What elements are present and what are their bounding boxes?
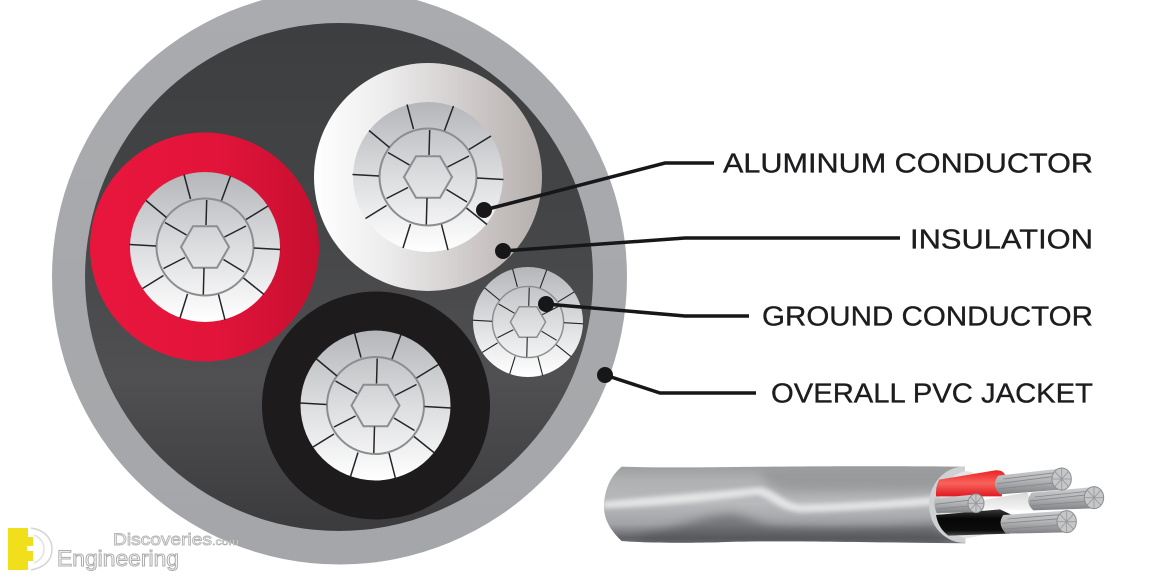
- leader: ground conductor: [538, 296, 749, 316]
- red insulated conductor: [90, 132, 319, 362]
- red wire: [936, 468, 1071, 496]
- white insulated conductor: [314, 63, 542, 291]
- leader: aluminum conductor: [476, 163, 714, 218]
- leader: overall PVC jacket: [597, 367, 756, 393]
- logo text: engineering: Engineering: [57, 546, 179, 571]
- logo mark: [8, 528, 52, 570]
- jacket opening: [939, 471, 983, 538]
- label: insulation: INSULATION: [910, 224, 1093, 254]
- cable illustration: [604, 466, 1104, 544]
- logo text: discoveries: Discoveries: [113, 530, 212, 549]
- dark cable filler: [85, 23, 593, 531]
- logo text: .com: .com: [212, 536, 239, 548]
- jacket body: [604, 466, 966, 544]
- jacket cut rim: [929, 466, 965, 543]
- label: ground conductor: GROUND CONDUCTOR: [762, 300, 1093, 332]
- label: aluminum conductor: ALUMINUM CONDUCTOR: [723, 148, 1093, 178]
- leader: insulation: [495, 238, 900, 259]
- black wire: [936, 509, 1076, 536]
- label: overall PVC jacket: OVERALL PVC JACKET: [771, 378, 1093, 408]
- watermark logo: [8, 528, 239, 571]
- overall PVC jacket: [52, 0, 627, 564]
- ground conductor: [473, 267, 583, 377]
- white wire: [982, 487, 1104, 510]
- cable cross-section: [52, 0, 627, 564]
- ground wire: [934, 494, 984, 513]
- black insulated conductor: [262, 292, 490, 520]
